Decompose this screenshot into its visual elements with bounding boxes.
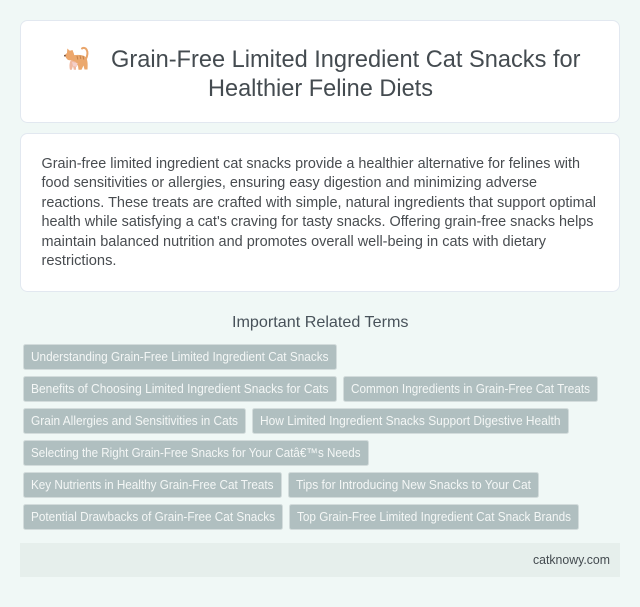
tag [252, 408, 568, 434]
text block: description: maintain balanced nutrition and promotes overall well-being in cats with dietary [42, 234, 547, 250]
tag: Benefits of Choosing Limited Ingredient Snacks for Cats [31, 382, 328, 396]
tag: Common Ingredients in Grain-Free Cat Treats [351, 382, 590, 396]
title: Healthier Feline Diets [208, 75, 433, 102]
heading: important related terms: Important Related Terms [232, 314, 408, 331]
tag: Top Grain-Free Limited Ingredient Cat Snack Brands [297, 510, 571, 524]
tag [290, 504, 578, 530]
tag [24, 472, 282, 498]
text block: description: Grain-free limited ingredient cat snacks provide a healthier alternative for felines with [42, 156, 580, 172]
tag: Grain Allergies and Sensitivities in Cats [31, 414, 238, 428]
tag [24, 504, 282, 530]
title [111, 46, 580, 102]
tag [24, 440, 368, 466]
tag: Key Nutrients in Healthy Grain-Free Cat Treats [31, 478, 274, 492]
tag [24, 344, 336, 370]
tag [24, 376, 336, 402]
footer source text: catknowy.com [533, 552, 610, 567]
tag: Potential Drawbacks of Grain-Free Cat Snacks [31, 510, 275, 524]
tag [344, 376, 598, 402]
footer [20, 543, 620, 577]
panel: description card [20, 134, 620, 292]
text block: description: food sensitivities or allergies, ensuring easy digestion and minimizing adverse [42, 175, 537, 191]
text block: description: health while satisfying a cat's craving for tasty snacks. Offering grain-free snacks helps [42, 214, 594, 230]
tag: Tips for Introducing New Snacks to Your Cat [296, 478, 531, 492]
text block: description: reactions. These treats are crafted with simple, natural ingredients that support optimal [42, 195, 596, 211]
tag list [24, 344, 598, 530]
tag [288, 472, 538, 498]
text block: description [42, 156, 596, 269]
tag: How Limited Ingredient Snacks Support Digestive Health [260, 414, 561, 428]
panel: title card [20, 20, 620, 122]
icon: cat [64, 48, 88, 70]
tag: Understanding Grain-Free Limited Ingredient Cat Snacks [31, 350, 328, 364]
text block: description: restrictions. [42, 253, 116, 269]
tag: Selecting the Right Grain-Free Snacks for Your Catâ€™s Needs [31, 446, 360, 460]
title: Grain-Free Limited Ingredient Cat Snacks for [111, 46, 580, 73]
tag [24, 408, 246, 434]
